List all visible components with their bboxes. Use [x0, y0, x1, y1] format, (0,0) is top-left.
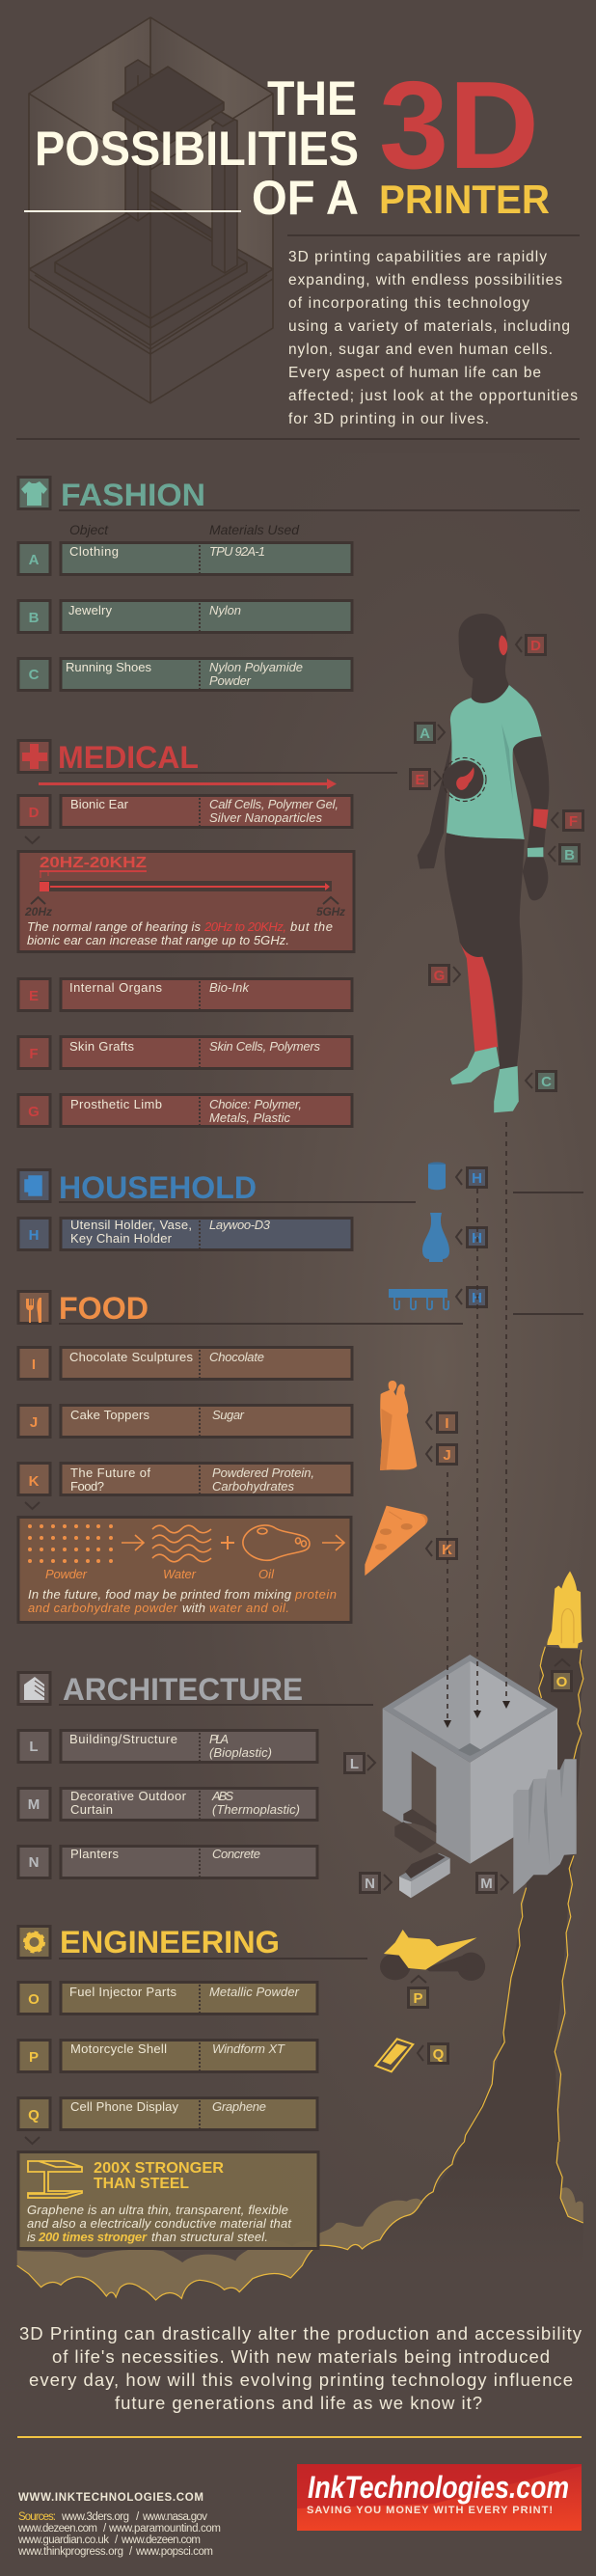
illustration: decorative curtain	[513, 1759, 577, 1894]
panel: future food: with	[182, 1601, 205, 1615]
row: O fuel injector: O	[28, 1991, 40, 2008]
panel: future food: Water	[163, 1567, 197, 1581]
ear	[499, 635, 507, 655]
panel: hearing range: 20Hz	[24, 905, 52, 918]
panel: future food: water and oil.	[209, 1601, 289, 1615]
row: E internal organs: E	[29, 988, 39, 1004]
row: G prosthetic limb: G	[28, 1104, 40, 1120]
footer: sources: /	[103, 2523, 107, 2535]
panel: future food: Powder	[45, 1567, 88, 1581]
panel: future food: protein	[294, 1587, 337, 1602]
row: D bionic ear: D	[29, 805, 40, 821]
row: A clothing	[18, 542, 352, 575]
title: POSSIBILITIES	[35, 122, 359, 176]
row: O fuel injector: Metallic Powder	[209, 1985, 300, 1999]
panel: future food	[18, 1517, 351, 1623]
row: L building: Building/Structure	[69, 1732, 177, 1746]
row: G prosthetic limb: Prosthetic Limb	[70, 1097, 162, 1111]
row: C running shoes	[18, 658, 352, 691]
section: architecture heading	[18, 1672, 373, 1707]
row: B jewelry	[18, 600, 352, 633]
title: PRINTER	[379, 177, 550, 222]
row: J cake toppers: Cake Toppers	[70, 1408, 150, 1422]
callout label C	[526, 1071, 555, 1090]
illustration: isometric building	[383, 1655, 557, 1864]
row: Q cell phone	[18, 2097, 317, 2130]
shirt	[447, 685, 541, 839]
icon: vase	[422, 1213, 449, 1262]
callout label P	[409, 1976, 428, 2007]
callout labels L, N, M	[345, 1754, 508, 1893]
icon: space shuttle	[547, 1571, 582, 1648]
callout label C: C	[541, 1074, 552, 1090]
footer: sources	[17, 2511, 221, 2558]
footer: sources: www.paramountind.com	[108, 2523, 221, 2535]
row: G prosthetic limb: Metals, Plastic	[209, 1110, 291, 1125]
callout labels I, J, K: K	[442, 1542, 452, 1558]
right arm	[513, 736, 549, 900]
illustration: 3D printer outline	[29, 17, 273, 403]
callout label G	[430, 965, 460, 984]
section: engineering heading: ENGINEERING	[60, 1925, 280, 1959]
shoes	[450, 1047, 500, 1084]
callout labels H: H	[472, 1290, 482, 1306]
row: N planters	[18, 1847, 317, 1877]
row: O fuel injector: Fuel Injector Parts	[69, 1985, 177, 1999]
closing paragraph: of life's necessities. With new materials being introduced	[52, 2346, 550, 2367]
row: K future of food: Powdered Protein,	[212, 1466, 314, 1480]
closing paragraph: 3D Printing can drastically alter the production and accessibility	[19, 2323, 582, 2343]
row: H utensil holder: Laywoo-D3	[209, 1218, 271, 1232]
callout label O: O	[556, 1674, 568, 1690]
illustration: smoke cloud	[17, 2142, 583, 2300]
panel: future food: and carbohydrate powder	[28, 1601, 178, 1615]
row: P motorcycle: P	[29, 2049, 39, 2066]
intro paragraph: affected; just look at the opportunities	[288, 388, 578, 404]
row: Q cell phone: Graphene	[212, 2099, 266, 2114]
legs	[445, 833, 525, 1069]
row: A clothing: A	[29, 552, 40, 568]
title	[24, 56, 550, 225]
callout label D: D	[530, 638, 541, 654]
section: medical heading: MEDICAL	[58, 740, 199, 775]
row: K future of food: The Future of	[70, 1466, 150, 1480]
callout labels H	[456, 1167, 486, 1306]
row: Q cell phone: Cell Phone Display	[70, 2099, 179, 2114]
callout label Q: Q	[433, 2046, 445, 2063]
row: K future of food: K	[29, 1473, 40, 1490]
row: D bionic ear: Silver Nanoparticles	[209, 810, 322, 825]
panel: graphene: 200X STRONGER	[94, 2160, 224, 2177]
row: B jewelry: Nylon	[209, 603, 241, 617]
panel: graphene: than structural steel.	[151, 2230, 268, 2244]
row: M curtain: Decorative Outdoor	[70, 1789, 187, 1803]
callout label A: A	[420, 726, 430, 742]
row: M curtain: M	[28, 1796, 40, 1813]
row: L building: PLA	[209, 1732, 229, 1746]
left arm	[418, 736, 452, 869]
intro paragraph	[288, 249, 578, 427]
icon: pizza slice	[365, 1506, 428, 1576]
icon: motorcycle	[380, 1930, 485, 1981]
footer: sources: www.guardian.co.uk	[17, 2535, 109, 2546]
row: K future of food: Carbohydrates	[212, 1479, 295, 1494]
column headers	[69, 522, 300, 537]
row: I chocolate	[18, 1347, 352, 1380]
powder dots	[28, 1524, 113, 1563]
panel: graphene: 200 times stronger	[38, 2230, 148, 2244]
section: fashion heading: FASHION	[61, 478, 205, 512]
callout label O	[552, 1659, 571, 1690]
illustration: person figure	[418, 614, 549, 1112]
row: J cake toppers	[18, 1405, 352, 1438]
row: N planters: N	[29, 1854, 39, 1871]
red arrow	[39, 779, 337, 789]
row: L building: L	[29, 1739, 39, 1755]
callout label P: P	[413, 1990, 423, 2007]
callout label F	[552, 810, 582, 830]
row: M curtain: ABS	[211, 1789, 233, 1803]
row: K future of food	[18, 1463, 352, 1495]
row: E internal organs	[18, 978, 352, 1011]
row: A clothing: Clothing	[69, 544, 119, 559]
row: F skin grafts: Skin Cells, Polymers	[209, 1039, 320, 1054]
column headers: Materials Used	[209, 522, 300, 537]
section: fashion heading	[18, 477, 580, 512]
footer: sources: www.thinkprogress.org	[17, 2546, 123, 2558]
callout labels I, J, K: I	[445, 1415, 449, 1432]
row: E internal organs: Bio-Ink	[209, 980, 251, 995]
row: P motorcycle: Windform XT	[212, 2042, 285, 2056]
row: M curtain	[18, 1789, 317, 1820]
footer: sources: /	[136, 2511, 140, 2523]
row: O fuel injector	[18, 1982, 317, 2014]
panel: hearing range: 5GHz	[316, 905, 345, 918]
footer: sources: /	[129, 2546, 133, 2558]
callout label B: B	[564, 847, 575, 863]
callout labels L, N, M: N	[365, 1876, 375, 1892]
row: F skin grafts	[18, 1036, 352, 1069]
steps	[403, 1809, 436, 1833]
section: medical heading	[18, 740, 397, 775]
arrows, waves, plus and oil	[122, 1525, 344, 1562]
footer: sources: www.dezeen.com	[121, 2535, 201, 2546]
panel: hearing range: 20Hz to 20KHz,	[203, 919, 286, 934]
row: C running shoes: C	[29, 667, 40, 683]
intro paragraph: 3D printing capabilities are rapidly	[288, 249, 547, 265]
dotted guide lines to building	[444, 1122, 510, 1728]
section: household heading	[18, 1169, 583, 1205]
callout label F: F	[569, 813, 578, 830]
row: J cake toppers: J	[30, 1414, 38, 1431]
row: P motorcycle	[18, 2040, 317, 2072]
row: H utensil holder: H	[29, 1227, 39, 1244]
row: D bionic ear: Calf Cells, Polymer Gel,	[209, 797, 339, 811]
intro paragraph: Every aspect of human life can be	[288, 365, 541, 381]
row: H utensil holder: Utensil Holder, Vase,	[70, 1218, 192, 1232]
chevron down	[25, 1502, 40, 1509]
callout labels H: H	[472, 1230, 482, 1247]
panel: graphene: and also a electrically conductive material that	[27, 2216, 292, 2231]
icon: steel I-beam	[28, 2161, 82, 2198]
row: D bionic ear	[18, 795, 352, 828]
icon: planter box	[399, 1853, 450, 1898]
section: food heading	[18, 1291, 583, 1326]
panel: graphene: THAN STEEL	[94, 2176, 189, 2192]
callout label G: G	[434, 968, 445, 984]
footer: sources: www.popsci.com	[135, 2546, 213, 2558]
panel: hearing range: bionic ear can increase that range up to 5GHz.	[27, 933, 289, 947]
panel: future food: Oil	[258, 1567, 275, 1581]
row: I chocolate: I	[32, 1357, 36, 1373]
row: G prosthetic limb	[18, 1094, 352, 1127]
row: N planters: Planters	[70, 1847, 120, 1861]
panel: graphene	[18, 2151, 318, 2248]
prosthetic leg	[460, 943, 498, 1054]
panel: hearing range: 20HZ-20KHZ	[40, 855, 147, 871]
row: L building: (Bioplastic)	[209, 1745, 272, 1760]
row: H utensil holder: Key Chain Holder	[70, 1231, 173, 1246]
icon: mug	[25, 1176, 41, 1195]
footer: sources: Sources:	[18, 2511, 56, 2523]
row: K future of food: Food?	[70, 1479, 104, 1494]
row: C running shoes: Nylon Polyamide	[209, 660, 303, 674]
row: D bionic ear: Bionic Ear	[70, 797, 129, 811]
row: Q cell phone: Q	[28, 2107, 40, 2124]
closing paragraph	[19, 2323, 582, 2413]
callout label D	[516, 635, 546, 654]
row: F skin grafts: Skin Grafts	[69, 1039, 135, 1054]
wrist band and skin graft	[528, 847, 543, 857]
row: C running shoes: Powder	[209, 673, 252, 688]
range bar	[40, 881, 332, 891]
row: M curtain: (Thermoplastic)	[212, 1802, 300, 1817]
row: N planters: Concrete	[212, 1847, 260, 1861]
callout label Q	[418, 2043, 447, 2063]
panel: hearing range	[18, 851, 354, 951]
section: engineering heading	[18, 1925, 367, 1959]
callout label E: E	[415, 772, 425, 788]
intro paragraph: using a variety of materials, including	[288, 318, 570, 335]
logo: InkTechnologies.com	[297, 2464, 582, 2531]
title: THE	[267, 71, 357, 125]
closing paragraph: future generations and life as we know it?	[115, 2393, 482, 2413]
callout labels L, N, M: M	[480, 1876, 493, 1892]
footer: sources: /	[115, 2535, 119, 2546]
footer: sources: www.3ders.org	[61, 2511, 129, 2523]
icon: fork and knife	[26, 1298, 41, 1323]
row: C running shoes: Running Shoes	[66, 660, 152, 674]
row: F skin grafts: F	[29, 1046, 39, 1062]
chevron down	[25, 2137, 40, 2144]
row: I chocolate: Chocolate	[209, 1350, 264, 1364]
panel: graphene: is	[27, 2230, 37, 2244]
panel: graphene: Graphene is an ultra thin, transparent, flexible	[27, 2203, 288, 2217]
callout labels I, J, K	[426, 1412, 457, 1559]
footer: website: WWW.INKTECHNOLOGIES.COM	[18, 2492, 203, 2504]
icon: cylinder holder	[428, 1162, 446, 1190]
row: G prosthetic limb: Choice: Polymer,	[209, 1097, 302, 1111]
section: food heading: FOOD	[59, 1291, 149, 1326]
callout labels I, J, K: J	[443, 1447, 451, 1464]
illustration: rocket smoke trail	[17, 1647, 583, 2299]
row: E internal organs: Internal Organs	[69, 980, 162, 995]
panel: hearing range: but the	[290, 919, 333, 934]
icon: gear	[27, 1935, 41, 1949]
logo: InkTechnologies.com: SAVING YOU MONEY WITH EVERY PRINT!	[307, 2505, 553, 2516]
column headers: Object	[69, 522, 109, 537]
section: household heading: HOUSEHOLD	[59, 1170, 257, 1205]
footer: sources: www.nasa.gov	[142, 2511, 207, 2523]
callout label A	[415, 724, 445, 743]
icon: building	[24, 1677, 44, 1700]
title: 3D	[379, 56, 539, 195]
head and neck	[459, 614, 509, 706]
icon: cake topper couple	[380, 1381, 417, 1470]
callout label B	[549, 845, 579, 864]
row: P motorcycle: Motorcycle Shell	[70, 2042, 167, 2056]
icon: t-shirt	[21, 481, 47, 506]
icon: key hook rack	[389, 1289, 448, 1309]
callout label E	[411, 770, 441, 789]
closing paragraph: every day, how will this evolving printing technology influence	[29, 2370, 573, 2390]
panel: future food: In the future, food may be printed from mixing	[28, 1587, 292, 1602]
section: architecture heading: ARCHITECTURE	[63, 1672, 303, 1707]
intro paragraph: of incorporating this technology	[288, 295, 529, 312]
icon: phone	[375, 2039, 413, 2071]
row: B jewelry: B	[29, 610, 40, 626]
intro paragraph: expanding, with endless possibilities	[288, 272, 562, 288]
icon: cross	[22, 744, 47, 769]
intro paragraph: nylon, sugar and even human cells.	[288, 342, 553, 358]
row: L building	[18, 1731, 317, 1762]
intro paragraph: for 3D printing in our lives.	[288, 411, 489, 427]
footer: sources: www.dezeen.com	[17, 2523, 97, 2535]
row: H utensil holder	[18, 1218, 352, 1250]
callout labels L, N, M: L	[350, 1756, 359, 1772]
icon: stomach organ	[443, 758, 486, 801]
chevron down	[25, 836, 40, 843]
row: A clothing: TPU 92A-1	[209, 544, 265, 559]
title: OF A	[252, 171, 359, 225]
row: I chocolate: Chocolate Sculptures	[69, 1350, 193, 1364]
panel: hearing range: The normal range of hearing is	[27, 919, 201, 934]
row: B jewelry: Jewelry	[68, 603, 112, 617]
row: J cake toppers: Sugar	[212, 1408, 245, 1422]
callout labels H: H	[472, 1170, 482, 1187]
row: M curtain: Curtain	[70, 1802, 113, 1817]
